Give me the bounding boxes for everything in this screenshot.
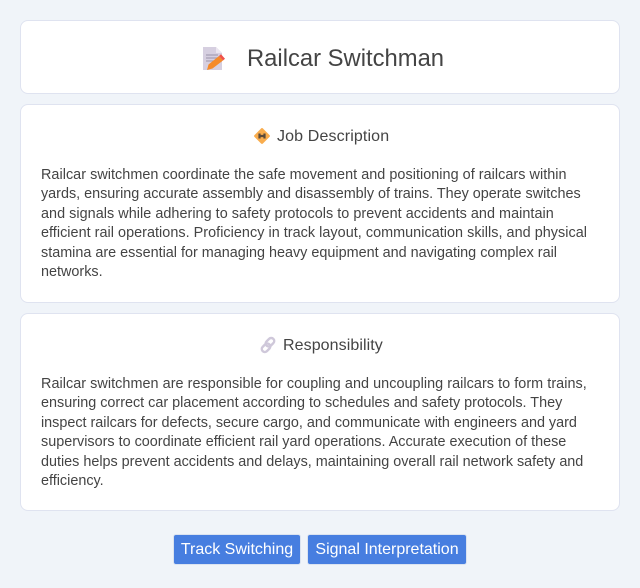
heading: responsibility: Responsibility <box>283 337 383 354</box>
text block: job description: stamina are essential for managing heavy equipment and navigating complex rail <box>41 245 557 261</box>
text block: job description: yards, ensuring accurate assembly and disassembly of trains. They operate switches <box>41 186 581 202</box>
text block: job description <box>41 167 587 280</box>
tag: signal interpretation: Signal Interpretation <box>315 541 459 558</box>
text block: job description: and signals while adhering to safety protocols to prevent accidents and maintain <box>41 206 554 222</box>
text block: responsibility <box>41 376 587 489</box>
icon: railway sign diamond <box>254 128 270 144</box>
tag: track switching: Track Switching <box>181 541 293 558</box>
text block: responsibility: supervisors to coordinate efficient rail yard operations. Accurate execution of these <box>41 434 566 450</box>
heading: job description: Job Description <box>277 128 389 145</box>
panel: responsibility <box>20 313 620 511</box>
text block: job description: efficient rail operations. Proficiency in track layout, communication skills, and physical <box>41 225 587 241</box>
tag: track switching <box>173 534 301 565</box>
icon: memo with pencil <box>203 47 225 70</box>
icon: chain link <box>260 336 276 354</box>
text block: responsibility: duties helps prevent accidents and delays, maintaining overall rail network safety and <box>41 454 583 470</box>
text block: responsibility: efficiency. <box>41 473 104 489</box>
text block: job description: networks. <box>41 264 103 280</box>
tag: signal interpretation <box>307 534 467 565</box>
text block: job description: Railcar switchmen coordinate the safe movement and positioning of railcars within <box>41 167 567 183</box>
title: Railcar Switchman <box>247 45 444 72</box>
text block: responsibility: Railcar switchmen are responsible for coupling and uncoupling railcars to form trains, <box>41 376 587 392</box>
panel: title card <box>20 20 620 94</box>
text block: responsibility: ensuring correct car placement according to schedules and safety protocols. They <box>41 395 562 411</box>
panel: job description <box>20 104 620 303</box>
text block: responsibility: inspect railcars for defects, secure cargo, and communicate with engineers and yard <box>41 415 577 431</box>
